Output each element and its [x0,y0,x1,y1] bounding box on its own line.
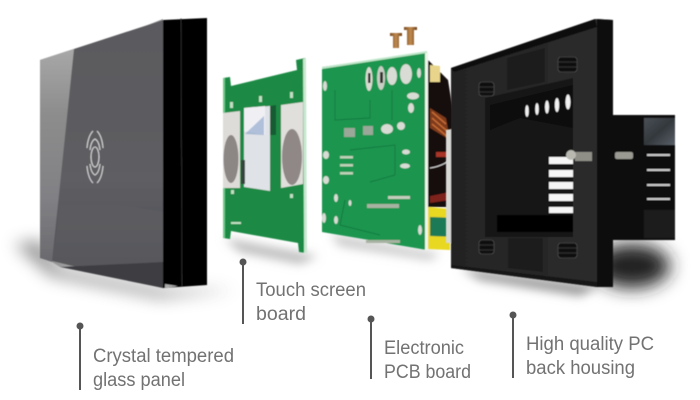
board substrate [322,52,427,250]
callout: crystal tempered glass panel: glass panel [93,370,185,391]
traces [335,90,395,235]
callout: electronic PCB board: Electronic [384,338,464,359]
callout: touch screen board [240,258,366,325]
textured rib panels [507,48,545,272]
frame [451,19,613,287]
solder pads [322,64,422,243]
callout: touch screen board: board [256,304,306,325]
panel: PC back housing [446,19,675,287]
board substrate [223,58,306,253]
glass face [40,20,163,288]
screw [566,150,592,161]
left sensor pad [223,111,240,188]
shadows under components [14,234,670,298]
clips [479,57,577,258]
callout: crystal tempered glass panel: Crystal tempered [93,346,234,367]
callout: electronic PCB board: PCB board [384,362,471,383]
right sensor pad [281,102,303,188]
centre sensor pad [244,106,270,191]
glass black side edge [163,18,207,288]
callout: electronic PCB board [368,316,471,383]
icon: concentric touch sensor [87,131,103,183]
oval holes [525,94,570,117]
panel: crystal tempered glass [40,18,207,288]
internal components behind PCB [428,60,458,250]
white slots [549,157,573,213]
callout: high quality PC back housing: back housing [526,358,635,379]
panel: electronic PCB board [322,27,458,250]
panel: touch screen board [223,58,307,253]
inner opening [485,78,573,237]
callout: crystal tempered glass panel [76,322,234,391]
white insert behind frame [446,125,473,243]
board small pads [230,92,293,224]
rear module [613,115,675,240]
glass reflection strip [40,49,74,262]
screw terminals [390,27,417,48]
callout: high quality PC back housing [510,312,654,379]
callout: touch screen board: Touch screen [256,280,366,301]
callout: high quality PC back housing: High quality PC [526,334,654,355]
